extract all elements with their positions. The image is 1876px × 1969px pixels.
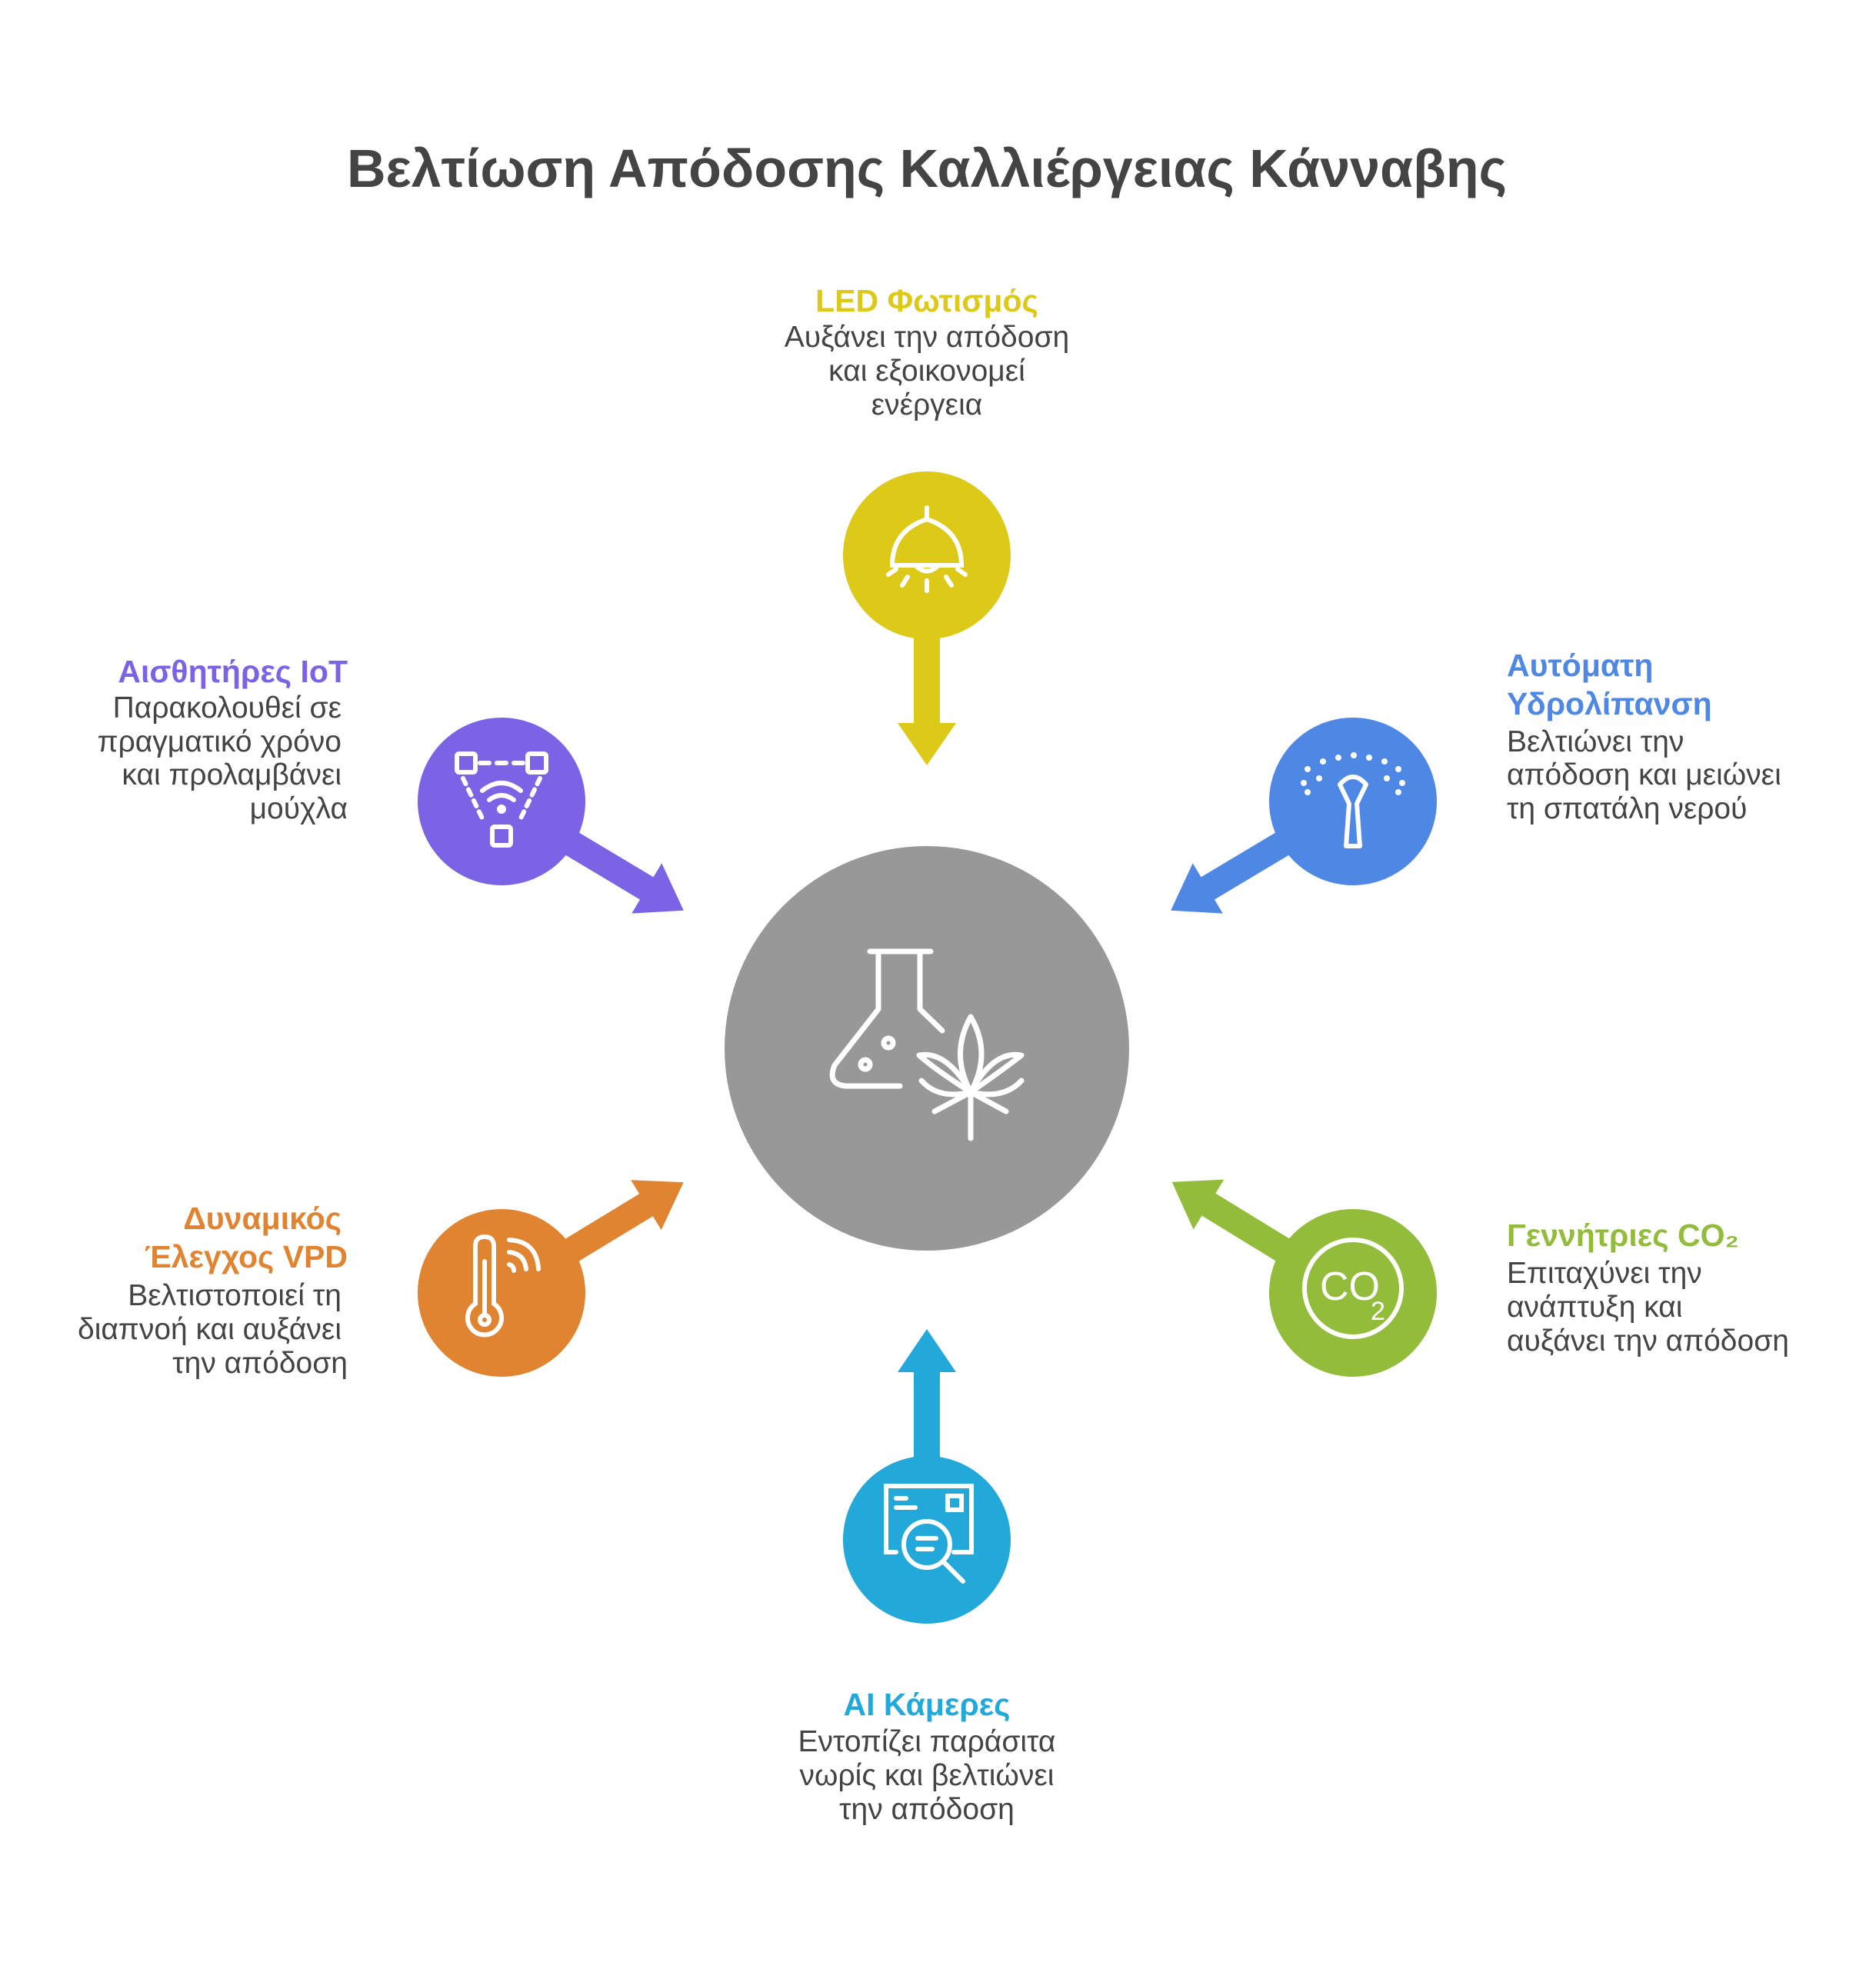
text: water: Υδρολίπανση — [1507, 686, 1712, 721]
circle: LED — [843, 471, 1011, 639]
text: VPD — [78, 1201, 348, 1380]
title: Βελτίωση Απόδοσης Καλλιέργειας Κάνναβης — [347, 138, 1507, 198]
arrow: AI — [898, 1329, 956, 1540]
text: water: απόδοση και μειώνει — [1507, 758, 1781, 791]
text: VPD: διαπνοή και αυξάνει — [78, 1313, 342, 1346]
circle: IoT — [418, 718, 585, 885]
text: AI: την απόδοση — [839, 1793, 1015, 1826]
text: IoT: μούχλα — [250, 792, 348, 825]
text: AI — [798, 1687, 1055, 1826]
icon: flask and cannabis leaf — [832, 951, 1021, 1138]
arrow: IoT — [486, 776, 698, 935]
text: LED — [785, 283, 1069, 421]
text: LED: ενέργεια — [871, 388, 982, 421]
text: water: Αυτόματη — [1507, 648, 1653, 683]
circle: VPD — [418, 1209, 585, 1377]
text: CO2: Γεννήτριες CO₂ — [1507, 1218, 1739, 1253]
text: IoT: πραγματικό χρόνο — [98, 725, 342, 758]
arrow: LED — [898, 555, 956, 765]
text: VPD: Βελτιστοποιεί τη — [128, 1279, 342, 1312]
circle: AI — [843, 1456, 1011, 1624]
center circle — [725, 846, 1129, 1251]
text: IoT — [98, 654, 348, 825]
text: CO2: αυξάνει την απόδοση — [1507, 1324, 1789, 1358]
text: AI: Εντοπίζει παράσιτα — [798, 1725, 1055, 1758]
arrow: water — [1156, 776, 1368, 935]
circle: CO2 — [1269, 1209, 1437, 1377]
circle: water — [1269, 718, 1437, 885]
circle: CO2: CO — [1320, 1264, 1380, 1309]
text: water — [1507, 648, 1781, 825]
text: VPD: την απόδοση — [172, 1347, 348, 1380]
text: AI: AI Κάμερες — [844, 1687, 1010, 1722]
text: VPD: Δυναμικός — [183, 1201, 342, 1236]
text: CO2 — [1507, 1218, 1789, 1358]
text: IoT: Παρακολουθεί σε — [113, 691, 342, 725]
circle: CO2: 2 — [1371, 1297, 1385, 1326]
text: IoT: και προλαμβάνει — [122, 758, 342, 791]
text: LED: LED Φωτισμός — [815, 283, 1038, 318]
text: VPD: Έλεγχος VPD — [145, 1239, 348, 1274]
text: LED: και εξοικονομεί — [828, 355, 1025, 388]
text: CO2: Επιταχύνει την — [1507, 1257, 1702, 1290]
text: water: Βελτιώνει την — [1507, 725, 1684, 758]
arrow: VPD — [486, 1158, 698, 1318]
arrow: CO2 — [1157, 1157, 1368, 1318]
text: IoT: Αισθητήρες IoT — [118, 654, 348, 689]
text: AI: νωρίς και βελτιώνει — [800, 1759, 1054, 1792]
text: water: τη σπατάλη νερού — [1507, 792, 1747, 825]
text: LED: Αυξάνει την απόδοση — [785, 321, 1069, 354]
text: CO2: ανάπτυξη και — [1507, 1291, 1682, 1324]
